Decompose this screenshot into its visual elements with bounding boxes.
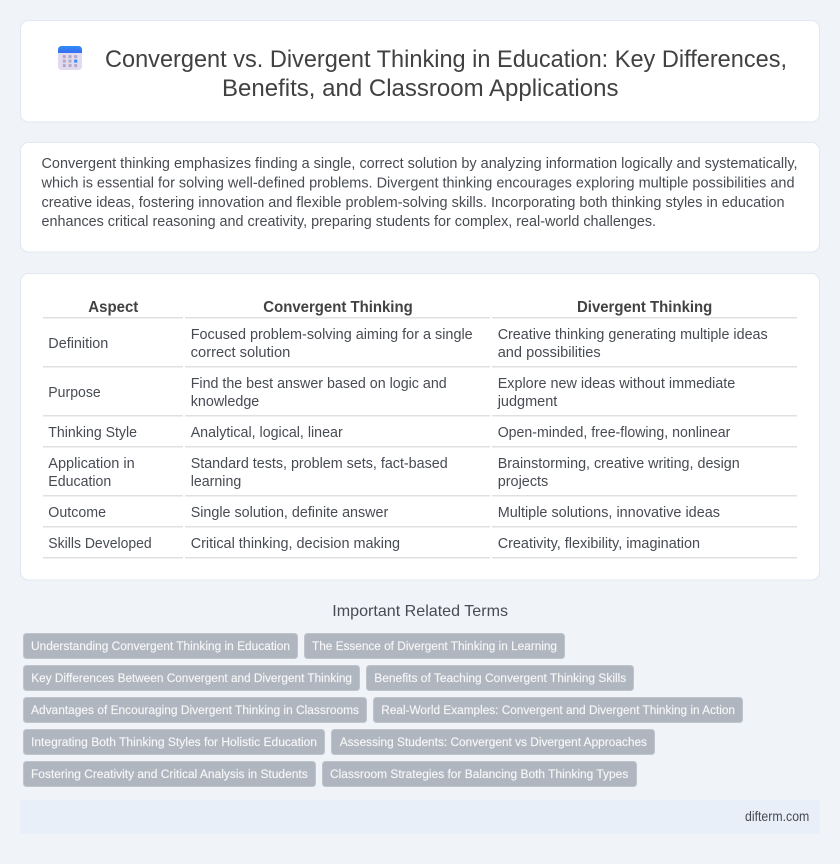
- table row: thinking style: [43, 425, 797, 448]
- tag: fostering creativity: Fostering Creativity and Critical Analysis in Students: [31, 767, 308, 781]
- table row: purpose: [43, 376, 797, 416]
- text block: summary paragraph: which is essential for solving well-defined problems. Divergent thinking encourages exploring multiple possibilities and: [41, 176, 794, 192]
- table header row: Aspect: [88, 299, 138, 316]
- table row: purpose: Explore new ideas without immediate: [498, 376, 735, 392]
- tag: benefits of teaching: [366, 666, 634, 690]
- tag: understanding convergent thinking: [24, 634, 298, 658]
- table row: definition: Creative thinking generating multiple ideas: [498, 327, 768, 343]
- text block: summary paragraph: enhances critical reasoning and creativity, preparing students for complex, real-world challenges.: [42, 214, 656, 230]
- text block: summary paragraph: [41, 156, 797, 230]
- table row: skills developed: [43, 536, 797, 558]
- table row: application in education: projects: [498, 474, 548, 490]
- tag: essence of divergent thinking: The Essence of Divergent Thinking in Learning: [312, 639, 557, 653]
- footer: difterm.com: [745, 808, 809, 824]
- table row: application in education: Standard tests, problem sets, fact-based: [191, 456, 448, 472]
- panel: comparison table: [20, 274, 820, 580]
- title: Convergent vs. Divergent Thinking in Education: Key Differences,: [105, 46, 787, 73]
- tag: integrating both: Integrating Both Thinking Styles for Holistic Education: [31, 735, 317, 749]
- text block: summary paragraph: creative ideas, fostering innovation and flexible problem-solving skills. Incorporating both thinking styles in education: [42, 195, 784, 211]
- table row: application in education: Brainstorming, creative writing, design: [498, 456, 740, 472]
- icon: calendar: [58, 46, 82, 70]
- table row: definition: and possibilities: [498, 345, 601, 361]
- table row: purpose: judgment: [497, 394, 557, 410]
- tag: advantages: Advantages of Encouraging Divergent Thinking in Classrooms: [31, 703, 359, 717]
- related term tags: [24, 634, 742, 786]
- table row: application in education: Education: [48, 474, 111, 490]
- table row: purpose: Purpose: [48, 385, 101, 401]
- tag: advantages: [24, 698, 366, 722]
- table header row: Convergent Thinking: [263, 299, 413, 316]
- table header row: Divergent Thinking: [577, 299, 712, 316]
- tag: key differences: [24, 666, 360, 690]
- tag: assessing students: Assessing Students: Convergent vs Divergent Approaches: [340, 735, 647, 749]
- table row: application in education: learning: [191, 474, 241, 490]
- tag: real-world examples: [374, 698, 742, 722]
- tag: classroom strategies: [322, 762, 636, 786]
- text block: summary paragraph: Convergent thinking emphasizes finding a single, correct solution by analyzing information logically and systematically,: [42, 156, 798, 172]
- table row: outcome: Multiple solutions, innovative ideas: [498, 505, 720, 521]
- table row: outcome: [43, 505, 797, 528]
- tag: benefits of teaching: Benefits of Teaching Convergent Thinking Skills: [374, 671, 626, 685]
- tag: essence of divergent thinking: [304, 634, 564, 658]
- table row: skills developed: Critical thinking, decision making: [191, 536, 400, 552]
- table row: outcome: Outcome: [48, 505, 106, 521]
- table row: purpose: knowledge: [191, 394, 259, 410]
- footer: [20, 800, 820, 834]
- table row: outcome: Single solution, definite answer: [191, 505, 388, 521]
- table row: skills developed: Creativity, flexibility, imagination: [498, 536, 700, 552]
- table row: application in education: Application in: [48, 456, 135, 472]
- tag: key differences: Key Differences Between Convergent and Divergent Thinking: [31, 671, 352, 685]
- panel: summary: [20, 142, 820, 252]
- tag: classroom strategies: Classroom Strategies for Balancing Both Thinking Types: [330, 767, 628, 781]
- tag: integrating both: [24, 730, 324, 754]
- table row: definition: Focused problem-solving aiming for a single: [191, 327, 473, 343]
- table row: application in education: [43, 456, 797, 496]
- table row: thinking style: Analytical, logical, linear: [191, 425, 343, 441]
- title: [105, 46, 787, 102]
- table row: purpose: Find the best answer based on logic and: [191, 376, 447, 392]
- table row: thinking style: Open-minded, free-flowing, nonlinear: [498, 425, 730, 441]
- table row: definition: correct solution: [191, 345, 290, 361]
- heading: important related terms: Important Related Terms: [332, 603, 508, 620]
- panel: header: [20, 20, 820, 122]
- tag: assessing students: [332, 730, 654, 754]
- tag: understanding convergent thinking: Understanding Convergent Thinking in Education: [31, 639, 290, 653]
- table row: thinking style: Thinking Style: [48, 425, 137, 441]
- table row: skills developed: Skills Developed: [48, 536, 152, 552]
- title: Benefits, and Classroom Applications: [222, 75, 618, 102]
- tag: fostering creativity: [24, 762, 316, 786]
- tag: real-world examples: Real-World Examples: Convergent and Divergent Thinking in Action: [381, 703, 735, 717]
- table row: definition: Definition: [48, 336, 108, 352]
- table row: definition: [43, 327, 797, 368]
- table header row: [43, 299, 797, 318]
